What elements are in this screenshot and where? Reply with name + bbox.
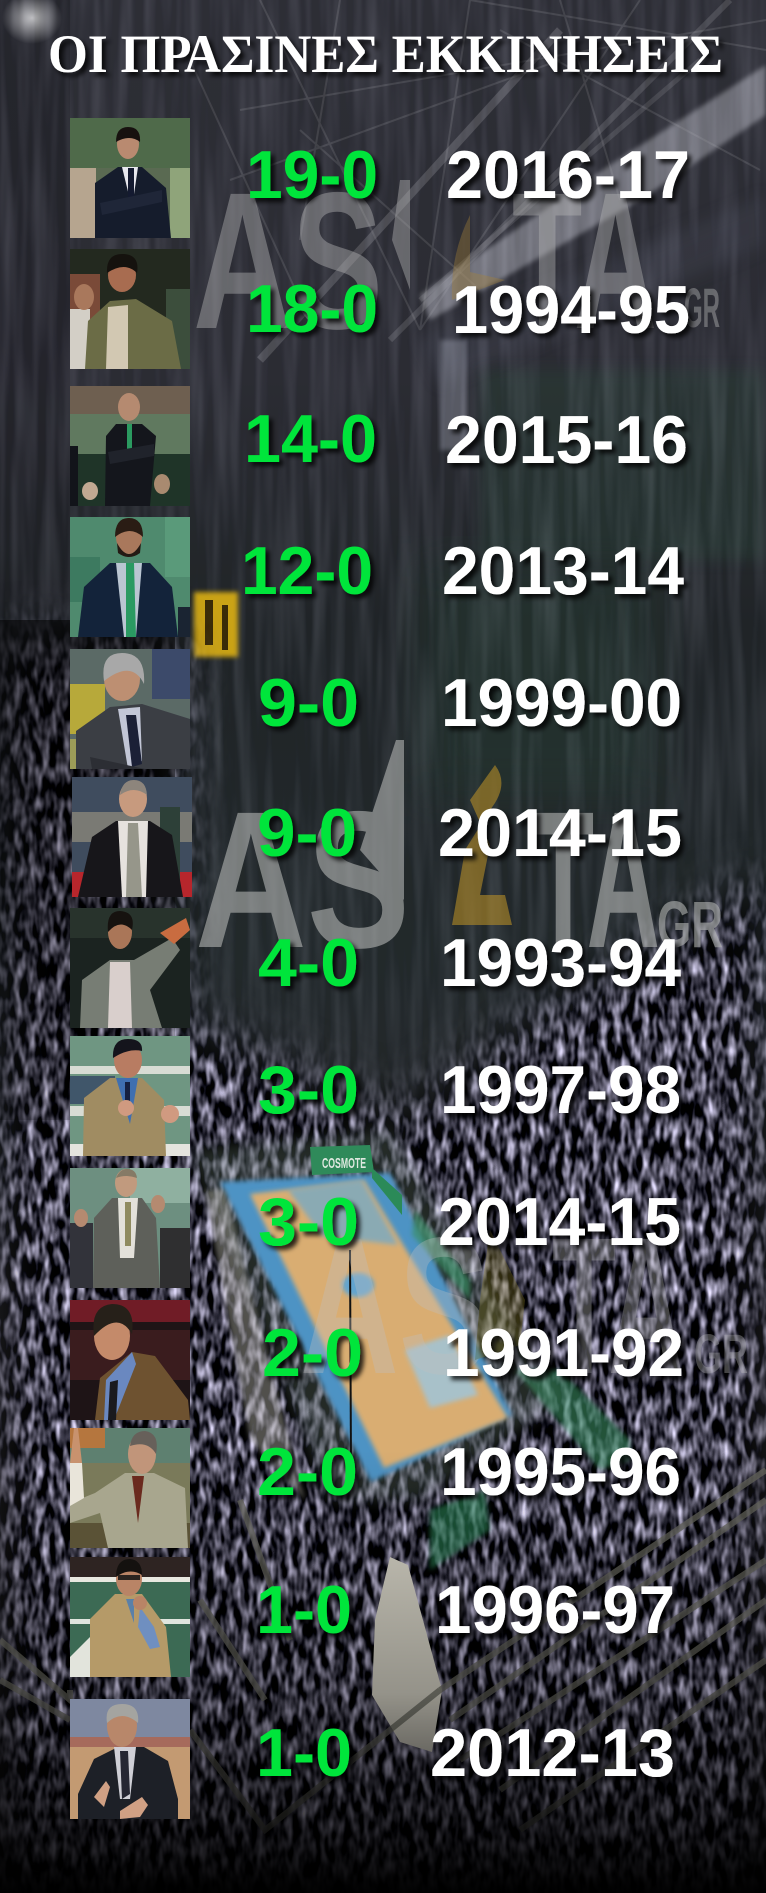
row 13	[256, 1715, 675, 1791]
watermark: upper: TA	[512, 152, 657, 370]
row 6: 2014-15	[438, 795, 682, 871]
crowd lower shade	[0, 1450, 766, 1893]
photo: coach 2014-15 second	[70, 1168, 190, 1288]
row 4	[241, 533, 684, 609]
row 1	[246, 137, 690, 213]
row 10	[262, 1315, 684, 1391]
row 11	[257, 1434, 681, 1510]
flag	[440, 340, 466, 450]
row 8	[258, 1052, 681, 1128]
row 1: 2016-17	[446, 137, 690, 213]
row 5: 1999-00	[441, 665, 682, 741]
row 5	[258, 665, 682, 741]
row 13: 2012-13	[430, 1715, 675, 1791]
row 11: 1995-96	[440, 1434, 681, 1510]
row 5: 9-0	[258, 665, 359, 741]
photo: coach 2012-13	[70, 1699, 190, 1819]
watermark: middle: GR	[657, 887, 723, 961]
row 1: 19-0	[246, 137, 378, 213]
row 9	[258, 1184, 681, 1260]
row 9: 2014-15	[438, 1184, 681, 1260]
row 3: 2015-16	[445, 402, 688, 478]
row 7: 1993-94	[440, 925, 681, 1001]
row 4: 2013-14	[442, 533, 684, 609]
photo: coach 2013-14	[70, 517, 190, 637]
row 4: 12-0	[241, 533, 373, 609]
row 2: 18-0	[246, 271, 378, 347]
row 3	[244, 401, 688, 478]
photo: coach 1995-96	[70, 1428, 190, 1548]
crowd	[0, 604, 766, 1884]
title: ΟΙ ΠΡΑΣΙΝΕΣ ΕΚΚΙΝΗΣΕΙΣ	[48, 24, 723, 84]
photo: coach 1999-00	[70, 649, 190, 769]
row 7: 4-0	[258, 925, 359, 1001]
photo: coach 2015-16	[70, 386, 190, 506]
row 2	[246, 271, 690, 348]
row 7	[258, 925, 681, 1001]
roof glow	[2, 0, 62, 44]
row 11: 2-0	[257, 1434, 358, 1510]
watermark: middle: AS	[195, 771, 410, 989]
row 12: 1-0	[256, 1572, 352, 1648]
row 6	[257, 795, 682, 871]
left column shade	[0, 620, 175, 1120]
scoreboard	[194, 592, 238, 657]
photo: coach 1994-95	[70, 249, 190, 369]
watermark: middle	[195, 740, 723, 989]
row 8: 1997-98	[440, 1052, 681, 1128]
photo: coach 1996-97	[70, 1557, 190, 1677]
watermark: upper: AS	[193, 152, 383, 370]
basketball court: COSMOTE	[322, 1155, 366, 1172]
row 12	[256, 1572, 675, 1648]
photo: coach 2016-17	[70, 118, 190, 238]
row 12: 1996-97	[435, 1572, 675, 1648]
row 9: 3-0	[258, 1184, 359, 1260]
photo: coach 2014-15	[72, 777, 192, 897]
watermark: lower: AS	[300, 1197, 490, 1415]
row 10: 2-0	[262, 1315, 363, 1391]
roof light strip	[420, 65, 766, 320]
data rows	[241, 137, 690, 1791]
text: GR	[684, 276, 720, 339]
watermark: lower	[300, 1197, 748, 1415]
basketball court	[190, 1130, 630, 1570]
row 3: 14-0	[244, 401, 377, 477]
row 10: 1991-92	[443, 1315, 684, 1391]
row 6: 9-0	[257, 795, 357, 871]
row 8: 3-0	[258, 1052, 359, 1128]
white banner	[372, 1557, 442, 1752]
green wall panels	[420, 370, 766, 800]
watermark: upper	[193, 152, 720, 370]
rails	[0, 1470, 766, 1830]
row 2: 1994-95	[452, 272, 690, 348]
photo: coach 1991-92	[70, 1300, 190, 1420]
photo: coach 1993-94	[70, 908, 190, 1028]
vertical streak texture	[0, 0, 766, 1100]
photo: coach 1997-98	[70, 1036, 190, 1156]
row 13: 1-0	[256, 1715, 352, 1791]
